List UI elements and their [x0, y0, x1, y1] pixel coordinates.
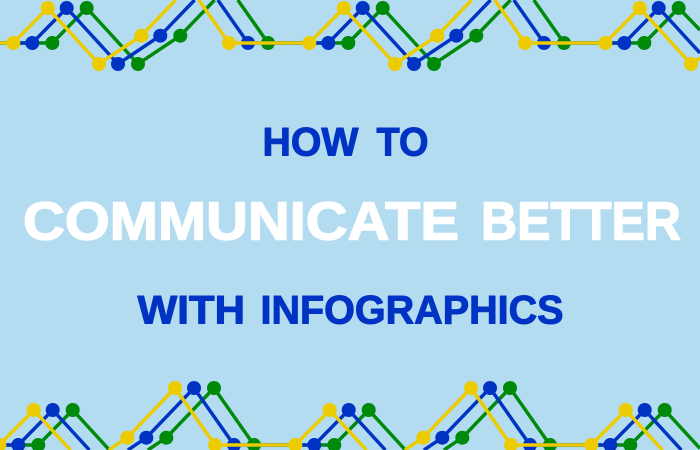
heading: how to: TO — [376, 121, 428, 165]
title: communicate better: COMMUNICATE — [23, 191, 459, 251]
subheading: with infographics: INFOGRAPHICS — [260, 289, 564, 333]
heading: how to: HOW — [262, 121, 359, 165]
subheading: with infographics: WITH — [138, 289, 245, 333]
title: communicate better — [23, 191, 681, 251]
top zigzag network lines — [0, 0, 700, 71]
bottom zigzag network lines — [0, 381, 700, 450]
heading: how to — [262, 121, 428, 165]
title: communicate better: BETTER — [481, 191, 681, 251]
